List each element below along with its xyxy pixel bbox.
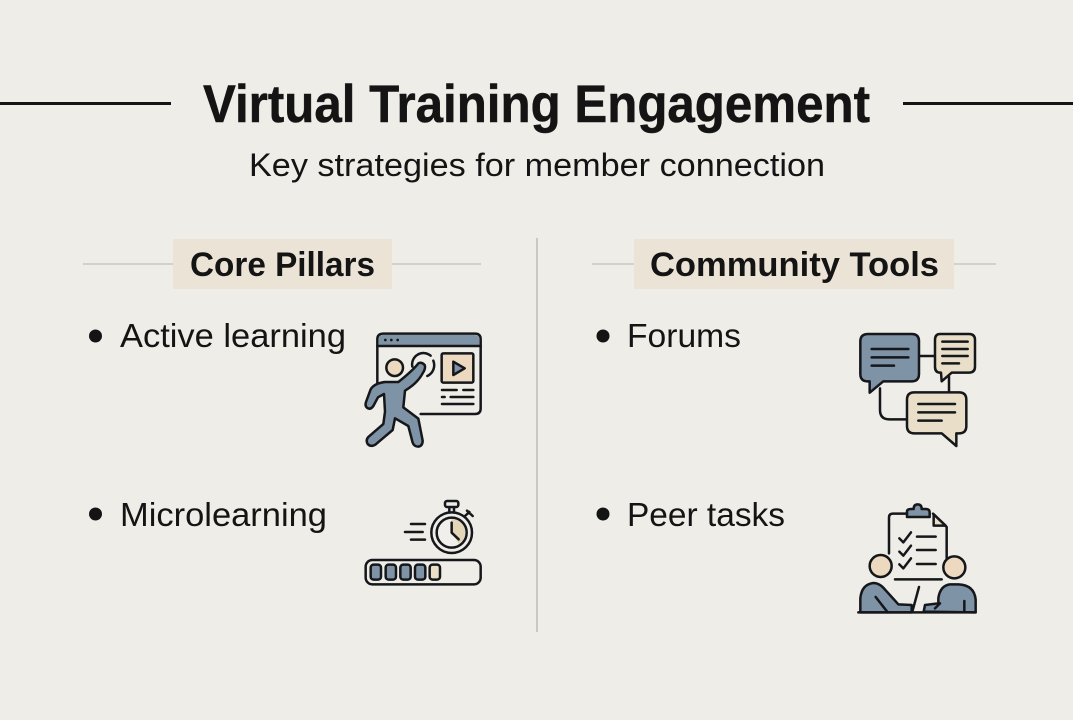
heading: core pillars — [173, 239, 392, 289]
subtitle: Key strategies for member connection — [249, 147, 825, 183]
icon: two people with checklist — [858, 504, 976, 612]
heading: community tools: Community Tools — [650, 246, 939, 284]
heading: core pillars: Core Pillars — [190, 246, 375, 284]
icon: connected chat bubbles — [860, 334, 975, 446]
list item: forums: Forums — [627, 317, 741, 354]
panel: community tools — [592, 239, 996, 612]
title: Virtual Training Engagement — [203, 75, 870, 134]
list item: peer tasks: Peer tasks — [627, 496, 785, 533]
icon: stopwatch and progress bar — [366, 501, 481, 584]
list item: active learning: Active learning — [120, 317, 346, 354]
panel: core pillars — [83, 239, 481, 584]
list item: microlearning: Microlearning — [120, 496, 327, 533]
icon: person interacting with video window — [366, 334, 481, 447]
heading: community tools — [634, 239, 954, 289]
